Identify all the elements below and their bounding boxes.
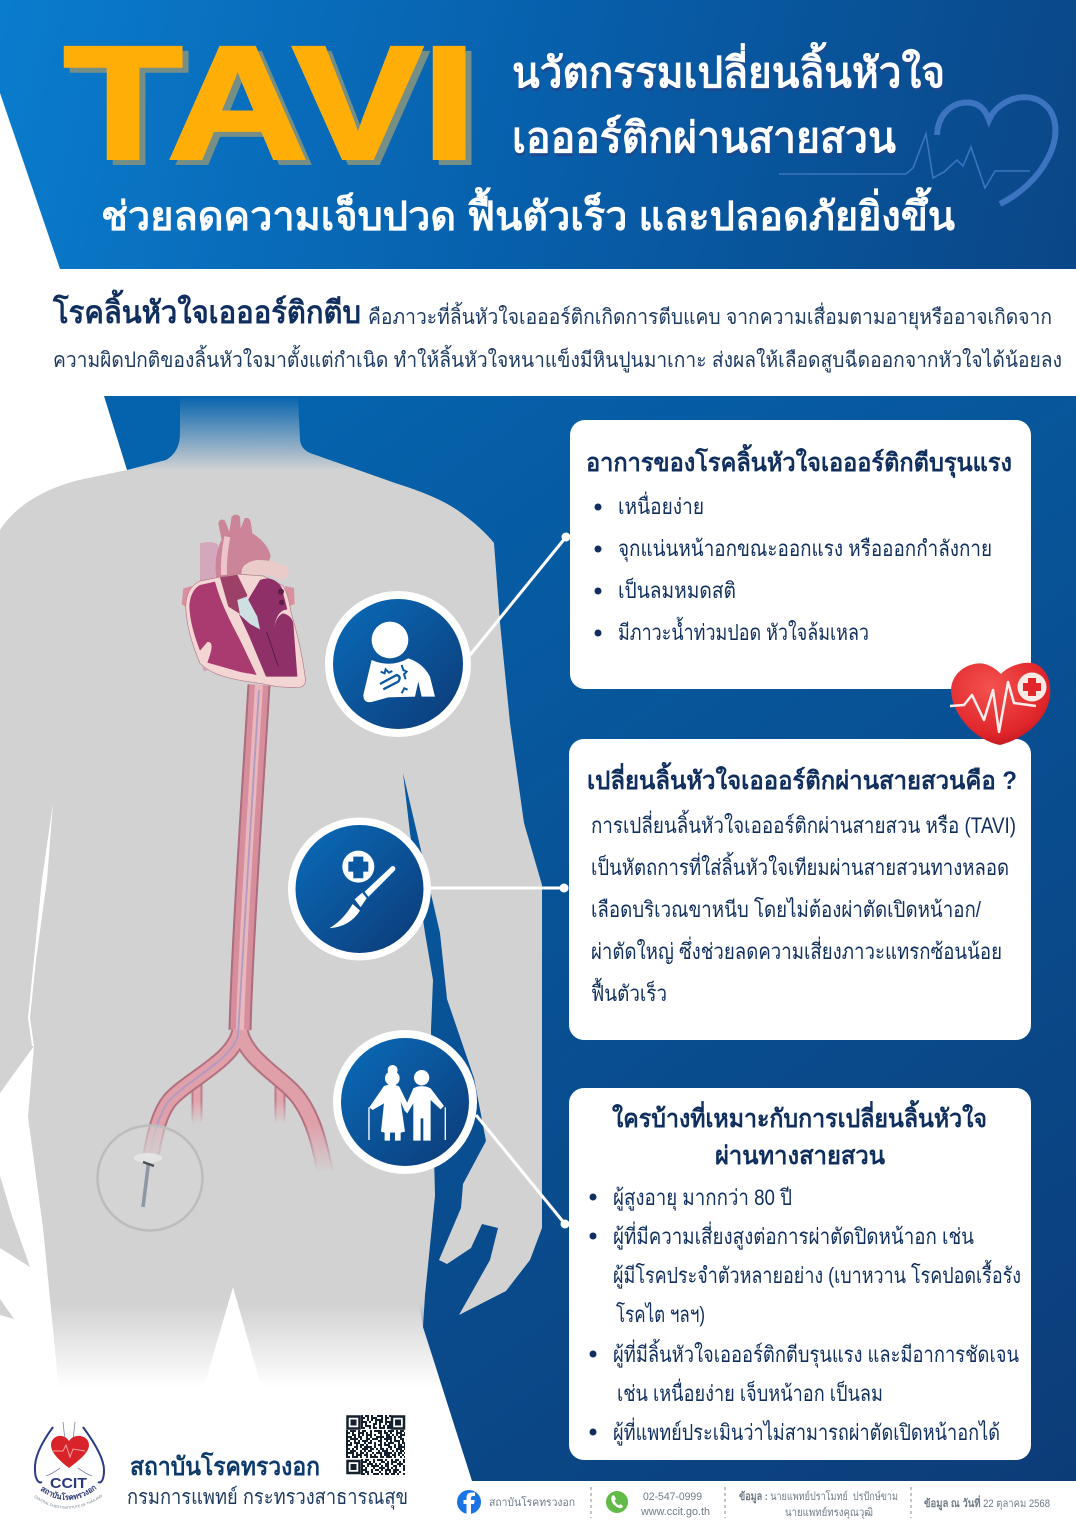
panel: symptoms <box>570 420 1031 689</box>
phone and website: 02-547-0999 <box>643 1491 702 1503</box>
TAVI description: ผ่าตัดใหญ่ ซึ่งช่วยลดความเสี่ยงภาวะแทรกซ้อนน้อย <box>591 936 1002 964</box>
eligibility list: ผู้สูงอายุ มากกว่า 80 ปี <box>613 1185 792 1211</box>
facebook name: สถาบันโรคทรวงอก <box>489 1495 575 1509</box>
data author <box>739 1489 898 1519</box>
intro term: โรคลิ้นหัวใจเอออร์ติกตีบ <box>52 289 361 330</box>
icon: scalpel with medical cross <box>288 818 431 960</box>
eligibility list: ผู้ที่แพทย์ประเมินว่าไม่สามารถผ่าตัดเปิดหน้าอกได้ <box>613 1417 1000 1446</box>
body silhouette <box>0 396 600 1404</box>
TAVI heading: เปลี่ยนลิ้นหัวใจเอออร์ติกผ่านสายสวนคือ ? <box>587 761 1017 795</box>
gap between left arm and torso <box>28 803 53 1046</box>
intro text block <box>52 289 1062 373</box>
access site marker with catheter <box>98 1126 202 1230</box>
symptoms list: จุกแน่นหน้าอกขณะออกแรง หรือออกกำลังกาย <box>618 536 992 562</box>
panel: eligible patients <box>569 1088 1031 1460</box>
eligibility list: ผู้ที่มีความเสี่ยงสูงต่อการผ่าตัดปิดหน้าอก เช่น <box>613 1221 974 1250</box>
eligibility heading <box>612 1099 987 1170</box>
symptoms heading: อาการของโรคลิ้นหัวใจเอออร์ติกตีบรุนแรง <box>586 443 1012 479</box>
TAVI description <box>591 810 1016 1006</box>
icon: phone <box>606 1491 628 1513</box>
heart anatomy illustration <box>182 515 306 688</box>
symptoms list: มีภาวะน้ำท่วมปอด หัวใจล้มเหลว <box>618 617 869 645</box>
panel: what is TAVI <box>569 739 1031 1040</box>
eligibility list: โรคไต ฯลฯ) <box>616 1302 705 1327</box>
blue panel background <box>104 396 1076 1481</box>
footer contact strip <box>457 1487 1050 1519</box>
header banner <box>0 0 1076 269</box>
institute name: สถาบันโรคทรวงอก <box>130 1451 320 1481</box>
icon: elderly couple <box>333 1030 477 1174</box>
symptoms list: เหนื่อยง่าย <box>618 491 704 519</box>
eligibility list <box>590 1185 1021 1446</box>
data author: นายแพทย์ทรงคุณวุฒิ <box>785 1506 873 1519</box>
logo: CCIT <box>34 1422 105 1509</box>
subtitle: ช่วยลดความเจ็บปวด ฟื้นตัวเร็ว และปลอดภัยยิ่งขึ้น <box>101 187 955 239</box>
title: TAVI: TAVI <box>64 13 476 192</box>
connector lines <box>431 532 570 1228</box>
heading line 2: เอออร์ติกผ่านสายสวน <box>512 114 896 161</box>
TAVI description: ฟื้นตัวเร็ว <box>591 978 667 1006</box>
logo: CCIT: CENTRAL CHEST INSTITUTE OF THAILAND <box>34 1494 102 1509</box>
icon: chest pain person <box>325 591 471 737</box>
icon: heart outline with pulse <box>779 97 1055 204</box>
footer contact strip: www.ccit.go.th <box>640 1506 710 1518</box>
aorta and iliac arteries <box>150 685 326 1176</box>
QR code <box>346 1416 405 1474</box>
symptoms list: เป็นลมหมดสติ <box>618 576 736 603</box>
heading line 1: นวัตกรรมเปลี่ยนลิ้นหัวใจ <box>512 41 945 96</box>
left hand <box>0 1176 30 1319</box>
icon: red heart with pulse <box>950 663 1050 745</box>
icon: facebook <box>457 1490 481 1514</box>
eligibility heading: ผ่านทางสายสวน <box>715 1142 885 1170</box>
TAVI description: เป็นหัตถการที่ใส่ลิ้นหัวใจเทียมผ่านสายสวนทางหลอด <box>591 852 1009 880</box>
data date: ข้อมูล ณ วันที่ 22 ตุลาคม 2568 <box>924 1495 1050 1511</box>
data author: ข้อมูล : นายแพทย์ปราโมทย์ ปรปักษ์ขาม <box>739 1489 898 1504</box>
eligibility list: เช่น เหนื่อยง่าย เจ็บหน้าอก เป็นลม <box>617 1378 883 1406</box>
logo: CCIT: สถาบันโรคทรวงอก <box>40 1486 97 1500</box>
TAVI description: การเปลี่ยนลิ้นหัวใจเอออร์ติกผ่านสายสวน หรือ (TAVI) <box>591 810 1016 838</box>
department name: กรมการแพทย์ กระทรวงสาธารณสุข <box>127 1485 408 1510</box>
TAVI description: เลือดบริเวณขาหนีบ โดยไม่ต้องผ่าตัดเปิดหน้าอก/ <box>591 897 982 922</box>
symptoms list <box>594 491 992 645</box>
right hand backing <box>445 1200 542 1330</box>
eligibility heading: ใครบ้างที่เหมาะกับการเปลี่ยนลิ้นหัวใจ <box>612 1099 987 1133</box>
gap between right arm and torso <box>403 773 600 1404</box>
logo: CCIT: CCIT <box>50 1475 87 1492</box>
